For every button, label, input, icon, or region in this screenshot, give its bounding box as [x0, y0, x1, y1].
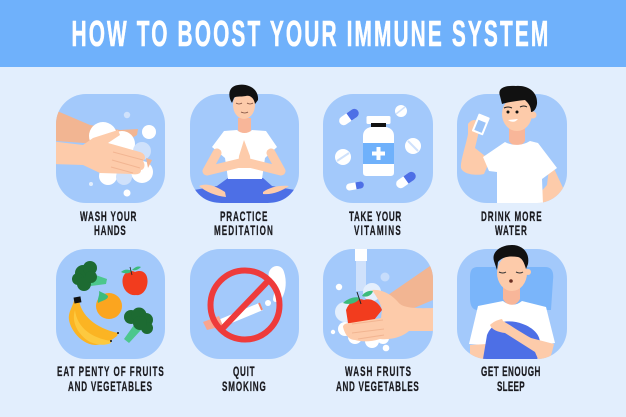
icon: shirt — [483, 141, 557, 204]
label: wash your hands: WASH YOUR — [80, 210, 136, 225]
label: wash fruits and vegetables: AND VEGETABLES — [336, 380, 419, 395]
icon: soap foam — [89, 122, 153, 185]
label: quit smoking — [222, 365, 266, 395]
icon: crossed legs — [194, 178, 295, 203]
icon: arm left — [470, 344, 486, 359]
panel: quit smoking — [190, 249, 299, 359]
label: practice meditation: PRACTICE — [220, 210, 267, 225]
icon: washing hands — [343, 290, 433, 341]
label: get enough sleep: GET ENOUGH — [481, 365, 540, 380]
icon: head — [502, 100, 532, 131]
icon: broccoli top-left — [72, 261, 107, 291]
label: take your vitamins: VITAMINS — [354, 224, 401, 239]
icon: bubbles — [89, 112, 156, 196]
icon: prohibition sign — [210, 270, 280, 340]
icon: feet — [199, 185, 289, 197]
icon: blanket — [483, 321, 540, 360]
icon: neck — [503, 288, 520, 305]
label: eat plenty of fruits: EAT PENTY OF FRUITS — [57, 365, 164, 380]
icon: pillow — [470, 267, 553, 310]
icon: upper arm — [389, 266, 433, 308]
icon: praying hands — [238, 140, 251, 168]
label: take your vitamins — [349, 210, 401, 239]
icon: arms — [207, 153, 281, 171]
icon: right arm — [540, 170, 563, 203]
panel: eat fruits and vegetables — [56, 249, 165, 359]
icon: broccoli bottom-right — [124, 308, 153, 343]
label: drink more water: DRINK MORE — [481, 210, 542, 225]
label: wash fruits and vegetables: WASH FRUITS — [345, 365, 411, 380]
icon: smoke — [265, 266, 286, 306]
panel: take your vitamins — [323, 94, 433, 203]
icon: foam — [335, 283, 381, 322]
label: drink more water: WATER — [495, 224, 527, 239]
panel: drink more water — [457, 86, 567, 205]
icon: back arm — [56, 112, 138, 144]
label: quit smoking: SMOKING — [222, 380, 266, 395]
label: take your vitamins: TAKE YOUR — [349, 210, 401, 225]
label: eat plenty of fruits: AND VEGETABLES — [68, 380, 152, 395]
label: wash your hands — [80, 210, 136, 239]
icon: shirt — [212, 130, 277, 179]
icon: shirt — [469, 301, 555, 344]
label: get enough sleep: SLEEP — [497, 380, 525, 395]
label: quit smoking: QUIT — [233, 365, 255, 380]
icon: hair — [493, 245, 528, 270]
icon: head — [233, 96, 255, 119]
icon: neck — [238, 118, 251, 134]
panel: practice meditation — [190, 85, 299, 203]
icon: neck — [509, 128, 525, 145]
label: practice meditation: MEDITATION — [214, 224, 273, 239]
label: wash fruits and vegetables — [336, 365, 419, 395]
icon: capsules — [337, 107, 418, 191]
header band — [0, 0, 626, 67]
icon: glass of water — [472, 113, 490, 136]
icon: front hand — [50, 130, 145, 174]
icon: hair — [229, 85, 258, 104]
panel: wash your hands — [50, 94, 165, 203]
icon: orange — [96, 291, 122, 319]
icon: tablets — [335, 105, 421, 165]
label: eat plenty of fruits — [57, 365, 164, 395]
title: HOW TO BOOST YOUR IMMUNE SYSTEM — [72, 14, 548, 55]
icon: raised arm — [461, 120, 490, 175]
icon: head — [497, 255, 527, 291]
label: wash your hands: HANDS — [94, 224, 126, 239]
icon: hair — [499, 86, 537, 112]
icon: apple — [121, 266, 148, 295]
panel: wash fruits and vegetables — [323, 249, 433, 359]
icon: apple — [343, 291, 382, 325]
label: drink more water — [481, 210, 542, 239]
icon: water tap — [355, 249, 367, 291]
panel: get enough sleep — [457, 245, 567, 360]
label: practice meditation — [214, 210, 273, 239]
icon: bubbles — [331, 272, 390, 351]
icon: resting arm and hand — [490, 319, 554, 359]
label: get enough sleep — [481, 365, 540, 395]
icon: bananas — [69, 296, 119, 345]
icon: cigarette — [203, 303, 263, 330]
icon: vitamin bottle — [363, 116, 394, 176]
